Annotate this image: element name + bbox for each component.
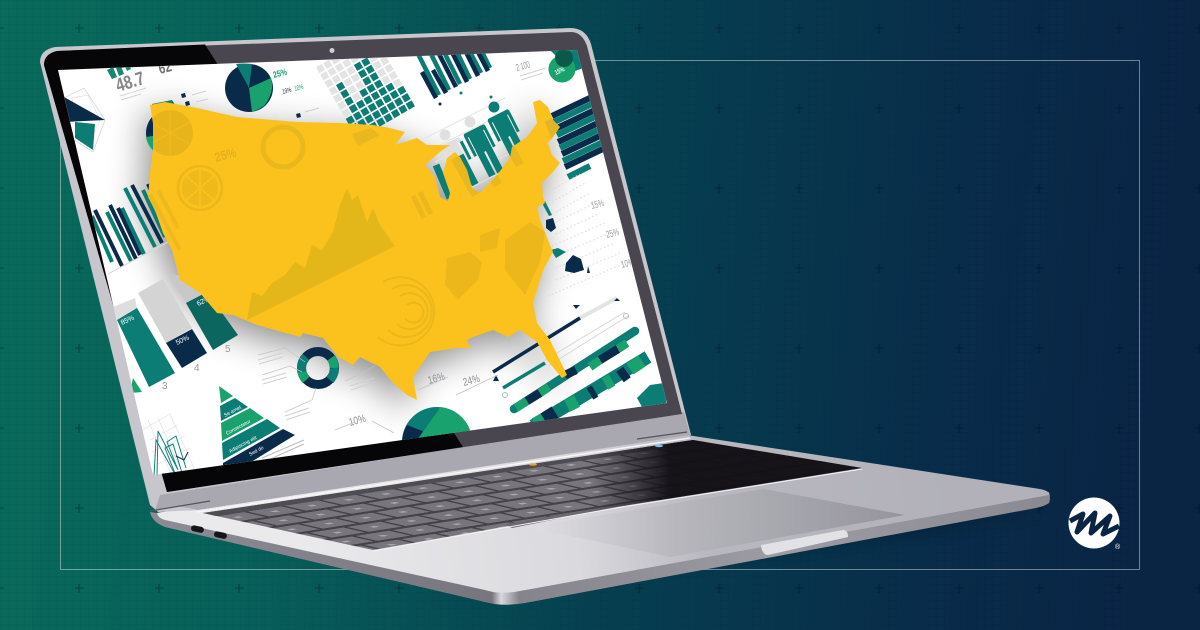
- laptop screen: [58, 50, 667, 475]
- waffle watermark: [352, 128, 380, 146]
- pie chart top: 19%: [282, 87, 292, 96]
- map watermark charts: [147, 110, 565, 345]
- green percent circle: 15%: [554, 66, 566, 77]
- numbered bars 3 4 5: 4: [194, 363, 200, 374]
- horizontal bar list right: [552, 96, 607, 177]
- numbered bars 3 4 5: 85%: [120, 315, 136, 327]
- hinge lines: [150, 432, 687, 511]
- trackpad: [527, 489, 905, 557]
- laptop shadow: [420, 510, 1040, 600]
- segmented pie watermark: [178, 166, 222, 210]
- pie chart top: [225, 64, 304, 112]
- people pictogram: [425, 97, 531, 198]
- waffle chart: [316, 57, 415, 126]
- percent labels bottom: 16%: [427, 371, 446, 387]
- US map: [148, 100, 567, 400]
- webcam: [330, 48, 334, 53]
- striped bar one: [514, 331, 635, 409]
- small bars watermark: [413, 192, 431, 218]
- company logo: ®: [1115, 543, 1121, 551]
- base front side: [150, 492, 1050, 605]
- pyramid chart: Adipiscing elit: [228, 435, 258, 455]
- stat: 48.7: [107, 66, 172, 100]
- grouped bars top right: [416, 50, 492, 106]
- pyramid chart: Se amet: [223, 404, 243, 419]
- green percent circle: [548, 50, 582, 82]
- pyramid chart: Consectetur: [225, 419, 252, 437]
- radar chart: [64, 88, 105, 152]
- world map watermark: [445, 222, 545, 300]
- percent labels right: 15%: [590, 198, 605, 212]
- dotted world map: [543, 174, 623, 296]
- numbered bars 3 4 5: [113, 273, 238, 393]
- hinge strip: [155, 412, 690, 511]
- keyboard: [197, 438, 862, 551]
- pie chart top: 25%: [272, 67, 288, 80]
- ring watermark: [263, 127, 303, 167]
- person 3: [488, 102, 520, 157]
- numbered bars 3 4 5: 50%: [175, 335, 191, 347]
- screen bezel: [44, 32, 682, 492]
- laptop illustration: [40, 28, 1050, 605]
- grouped bars left: [92, 184, 170, 274]
- pyramid chart: Sed do: [248, 445, 265, 458]
- small pie chart under map: [146, 91, 319, 157]
- person 1: [440, 130, 478, 186]
- hexagon badge: [637, 383, 667, 407]
- numbered bars 3 4 5: 5: [225, 344, 231, 355]
- USB ports: [191, 525, 227, 539]
- thin frame outline: [60, 60, 1140, 570]
- laptop lid frame: [40, 28, 691, 512]
- people watermark: [455, 135, 520, 195]
- laptop base: [150, 435, 1050, 605]
- base deck: [157, 435, 1049, 593]
- percent labels right: 25%: [605, 227, 620, 241]
- concentric rings watermark: [378, 277, 434, 345]
- person 2: [464, 116, 502, 178]
- percent labels bottom: 24%: [462, 373, 481, 389]
- percent labels bottom: [335, 371, 498, 433]
- stat: 48.7: 62: [157, 58, 174, 78]
- striped bar two: [533, 357, 648, 426]
- pie watermark: [152, 110, 193, 156]
- percent labels right: [591, 199, 631, 268]
- status lights: [529, 445, 663, 466]
- right bars watermark: [545, 113, 565, 140]
- company logo: [1068, 498, 1121, 551]
- numbered bars 3 4 5: 62%: [196, 296, 212, 308]
- pyramid chart: [219, 386, 304, 466]
- percent labels right: 10%: [620, 257, 635, 271]
- large pie chart bottom: [402, 407, 470, 440]
- stat: 48.7: 48.7: [113, 68, 147, 97]
- lake Michigan bar: [436, 165, 450, 198]
- map drop shadow: [142, 110, 561, 410]
- donut chart: [258, 348, 375, 420]
- text watermark: 25%: [213, 145, 238, 165]
- line chart: [142, 414, 195, 476]
- progress bars: [493, 298, 628, 398]
- chart lines behind people: [425, 98, 520, 188]
- stat: 2 100: [515, 60, 546, 80]
- area chart watermark: [247, 188, 395, 320]
- pie chart top: 10%: [294, 84, 304, 93]
- numbered bars 3 4 5: 3: [162, 381, 168, 392]
- stat: 2 100: 2 100: [515, 60, 532, 74]
- percent labels bottom: 10%: [348, 413, 367, 429]
- thumb notch: [761, 530, 848, 555]
